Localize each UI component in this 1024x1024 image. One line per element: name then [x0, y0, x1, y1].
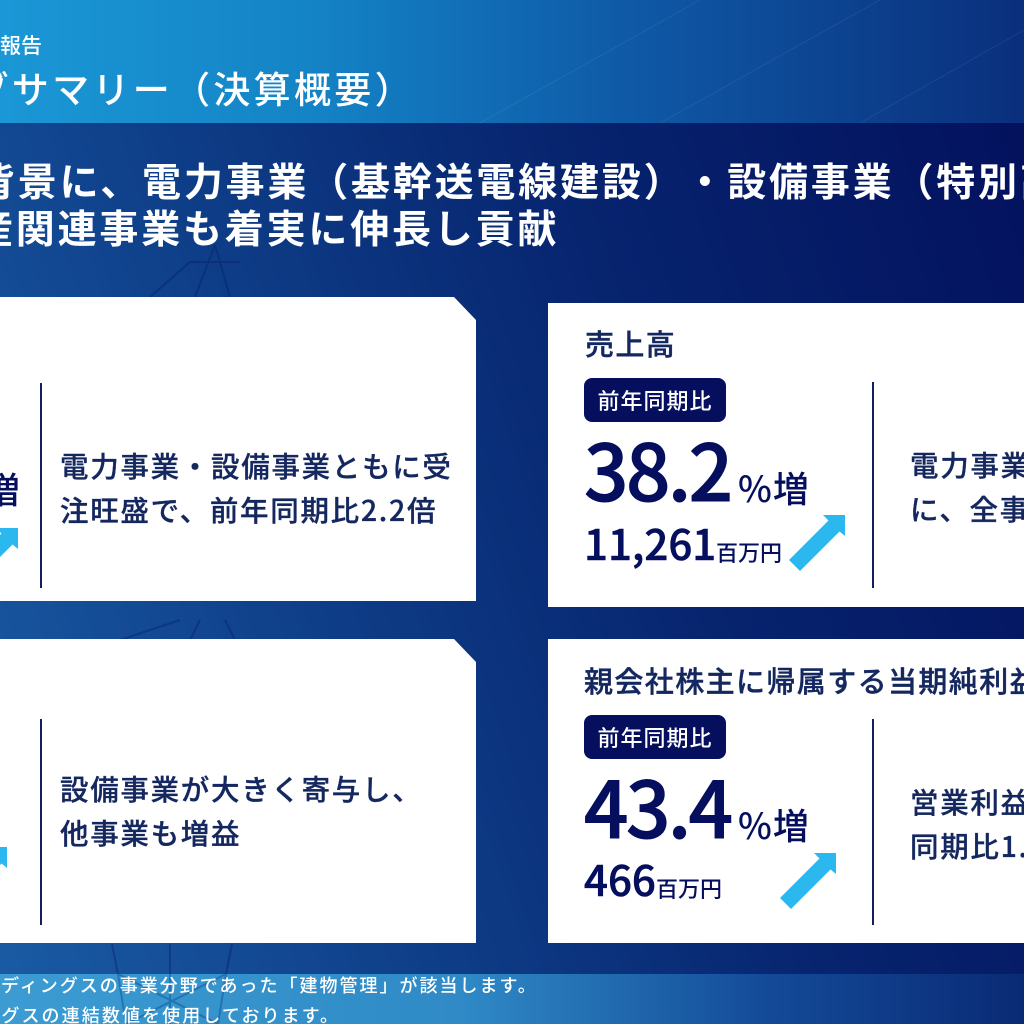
year on year badge — [584, 378, 726, 422]
net income growth: 43.4 — [584, 749, 731, 861]
amount unit: 百万円 — [716, 536, 782, 568]
net sales comment — [910, 444, 1024, 529]
comment text: 他事業も増益 — [60, 812, 241, 853]
comment text: 設備事業が大きく寄与し、 — [60, 768, 422, 809]
net income amount: 466 — [584, 848, 656, 909]
headline message — [0, 152, 1024, 255]
divider — [40, 719, 42, 925]
footnote band — [0, 974, 1024, 1024]
percent increase: %増 — [738, 798, 809, 850]
year on year badge: 前年同期比 — [597, 721, 712, 753]
divider — [40, 383, 42, 588]
panel: net income card — [548, 639, 1024, 943]
panel: bottom left card — [0, 639, 476, 943]
year on year badge: 前年同期比 — [597, 384, 712, 416]
comment text: 電力事業・設備事業ともに受 — [60, 445, 453, 486]
header band — [0, 0, 1024, 123]
amount unit: 百万円 — [656, 872, 722, 904]
net sales growth: 38.2 — [584, 412, 731, 524]
comment text — [60, 452, 450, 524]
net sales amount: 11,261 — [584, 512, 716, 573]
panel: top left card — [0, 297, 476, 601]
divider — [872, 382, 874, 588]
net income comment — [910, 781, 1024, 866]
panel: net sales card — [548, 303, 1024, 607]
net sales heading: 売上高 — [585, 322, 676, 364]
year on year badge — [584, 715, 726, 759]
comment text: 注旺盛で、前年同期比2.2倍 — [60, 489, 437, 530]
percent increase: %増 — [738, 461, 809, 513]
comment text — [60, 775, 402, 847]
divider — [872, 719, 874, 925]
